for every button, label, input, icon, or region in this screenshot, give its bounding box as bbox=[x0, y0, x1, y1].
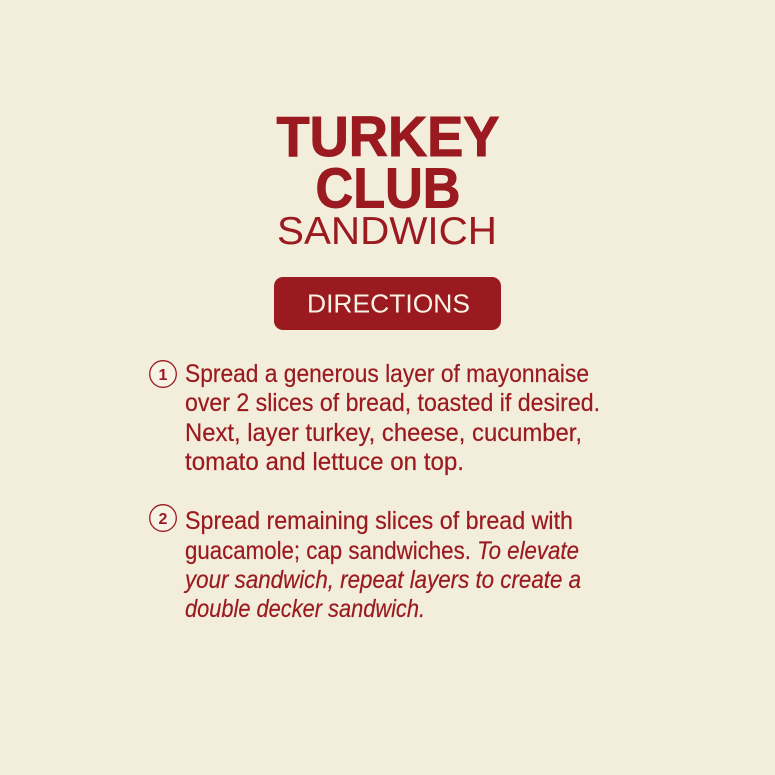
step 2 bbox=[150, 505, 581, 623]
text block: step 2 directions: guacamole; cap sandwiches. To elevate bbox=[185, 537, 579, 565]
title bbox=[276, 105, 500, 253]
text block: step 1 directions: Next, layer turkey, cheese, cucumber, bbox=[185, 419, 582, 447]
text block: step 2 directions: your sandwich, repeat layers to create a bbox=[183, 566, 581, 594]
text block: step 1 directions bbox=[185, 360, 600, 476]
title: TURKEY bbox=[276, 105, 500, 169]
text block: step 1 directions: Spread a generous layer of mayonnaise bbox=[185, 360, 589, 388]
step 1 bbox=[150, 360, 600, 476]
icon: number 2 bbox=[150, 505, 176, 531]
icon: number 2: 2 bbox=[159, 511, 168, 528]
icon: number 1 bbox=[150, 361, 176, 387]
text block: step 1 directions: tomato and lettuce on top. bbox=[185, 448, 464, 476]
text block: step 2 directions: double decker sandwich. bbox=[185, 595, 425, 623]
title: CLUB bbox=[316, 156, 460, 220]
button: directions bbox=[274, 277, 501, 330]
text block: step 1 directions: over 2 slices of bread, toasted if desired. bbox=[185, 389, 600, 417]
text block: step 2 directions bbox=[183, 507, 581, 623]
icon: number 1: 1 bbox=[159, 367, 168, 384]
title: SANDWICH bbox=[277, 210, 497, 253]
text block: step 2 directions: Spread remaining slices of bread with bbox=[185, 507, 573, 535]
button: directions: DIRECTIONS bbox=[307, 288, 470, 318]
